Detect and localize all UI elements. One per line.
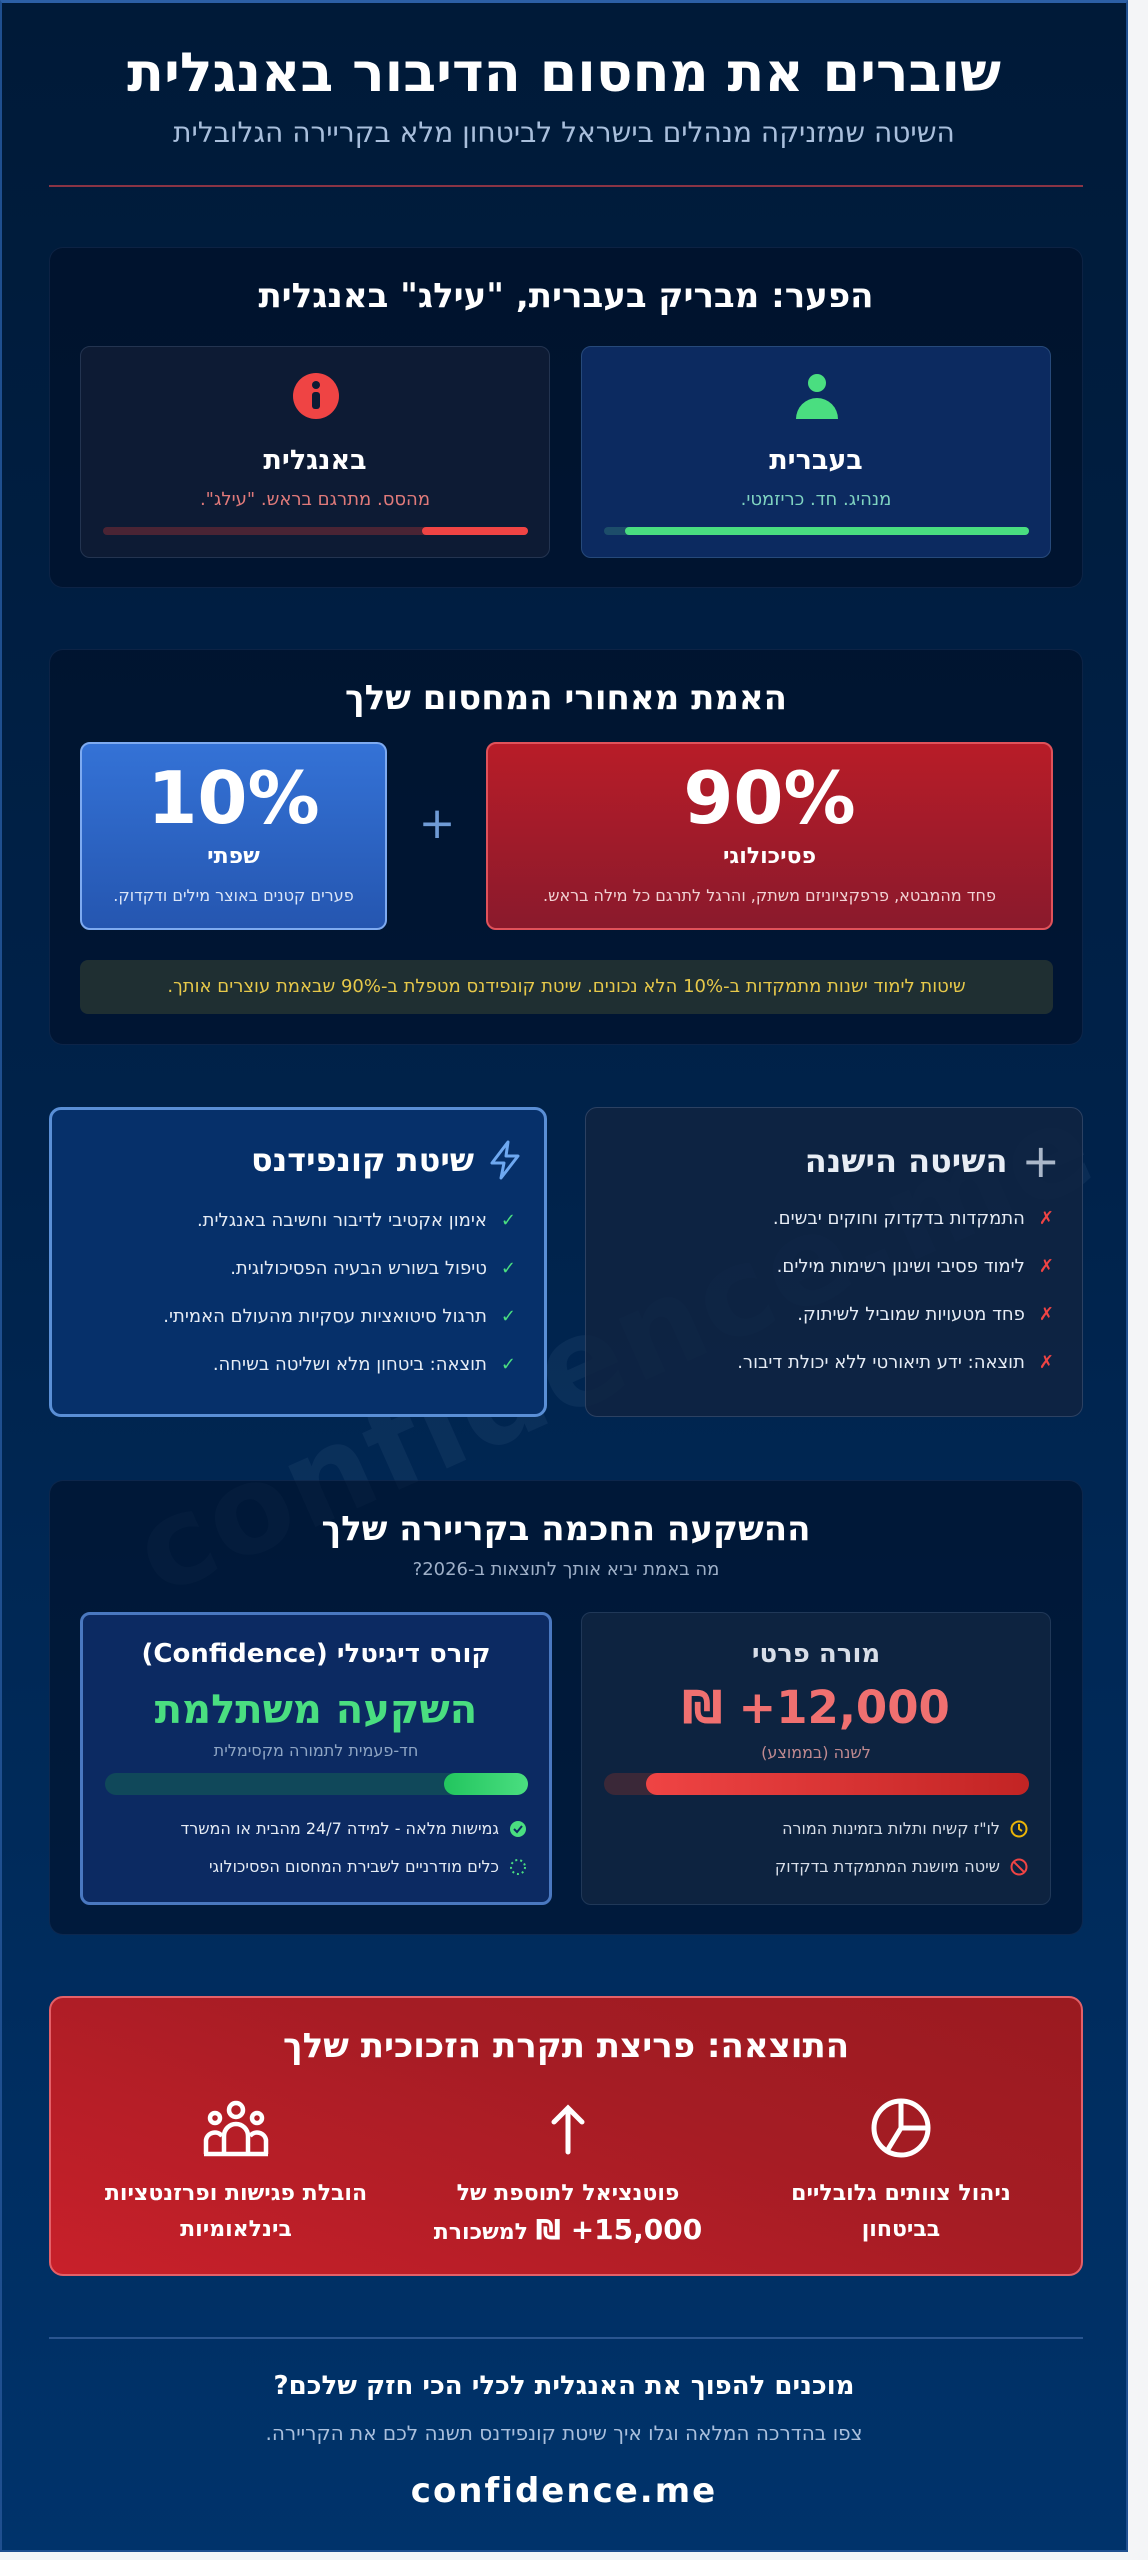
item: presentations: הובלת פגישות ופרזנטציות (105, 2181, 367, 2206)
box: 90%: 90% (683, 756, 856, 840)
footer text: צפו בהדרכה המלאה וגלו איך שיטת קונפידנס תשנה לכם את הקריירה. (266, 2421, 862, 2445)
item: salary: ₪ +15,000 למשכורת (434, 2213, 702, 2246)
label: בעברית (769, 445, 863, 476)
card: digital course: קורס דיגיטלי (Confidence) (141, 1639, 491, 1669)
item: presentations: בינלאומיות (180, 2217, 292, 2242)
item: global teams: בביטחון (862, 2217, 940, 2242)
list: ✗ (1039, 1208, 1054, 1229)
item: גמישות מלאה - למידה 24/7 מהבית או המשרד (180, 1819, 499, 1838)
box: 10%: שפתי (207, 844, 260, 869)
list: אימון אקטיבי לדיבור וחשיבה באנגלית. (197, 1210, 487, 1231)
box: 90%: פחד מהמבטא, פרפקציוניזם משתק, והרגל לתרגם כל מילה בראש. (543, 886, 996, 905)
box: 10% (80, 742, 387, 930)
panel: result (49, 1996, 1083, 2276)
card: private teacher: שיטה מיושנת המתמקדת בדקדוק (775, 1857, 1000, 1876)
label: השקעה משתלמת (155, 1687, 477, 1733)
footer question: מוכנים להפוך את האנגלית לכלי הכי חזק שלכם? (274, 2371, 854, 2401)
divider (49, 185, 1083, 187)
card: english (80, 346, 550, 558)
label: באנגלית (263, 445, 367, 476)
note bar (80, 960, 1053, 1014)
bar (604, 527, 1029, 535)
item: salary: פוטנציאל לתוספת של (457, 2181, 679, 2206)
panel: confidence method: ✓ (501, 1306, 516, 1327)
text: מהסס. מתרגם בראש. "עילג". (200, 489, 430, 510)
card: digital course: חד-פעמית לתמורה מקסימלית (214, 1741, 418, 1760)
panel: old method: ✗ (1039, 1352, 1054, 1373)
panel: confidence method: תרגול סיטואציות עסקיות מהעולם האמיתי. (163, 1306, 487, 1327)
card: digital course (80, 1612, 552, 1905)
panel: truth (49, 649, 1083, 1045)
panel: old method: ✗ (1039, 1304, 1054, 1325)
card: private teacher (581, 1612, 1051, 1905)
item: לו"ז קשיח ותלות בזמינות המורה (782, 1819, 1000, 1838)
bar (604, 1773, 1029, 1795)
panel: gap (49, 247, 1083, 588)
panel: old method: פחד מטעויות שמוביל לשיתוק. (797, 1304, 1025, 1325)
heading: ההשקעה החכמה בקריירה שלך (321, 1509, 811, 1549)
url: confidence.me (411, 2471, 717, 2511)
panel: old method (585, 1107, 1083, 1417)
panel: old method: ✗ (1039, 1256, 1054, 1277)
divider (49, 2337, 1083, 2339)
panel: confidence method: טיפול בשורש הבעיה הפסיכולוגית. (230, 1258, 487, 1279)
panel: old method: תוצאה: ידע תיאורטי ללא יכולת דיבור. (737, 1352, 1025, 1373)
heading (805, 1134, 1060, 1188)
subtitle: השיטה שמזניקה מנהלים בישראל לביטחון מלא בקריירה הגלובלית (173, 116, 955, 149)
box: 10%: פערים קטנים באוצר מילים ודקדוק. (113, 886, 354, 905)
panel: confidence method: ✓ (501, 1258, 516, 1279)
item: presentations (105, 2100, 367, 2242)
heading: שיטת קונפידנס (251, 1141, 474, 1179)
item: global teams: ניהול צוותים גלובליים (791, 2181, 1011, 2206)
icon: person (796, 374, 838, 419)
card: hebrew (581, 346, 1051, 558)
item: salary (434, 2104, 702, 2246)
panel: investment (49, 1480, 1083, 1935)
card: private teacher: לשנה (בממוצע) (761, 1743, 871, 1762)
box: 90% (486, 742, 1053, 930)
heading: האמת מאחורי המחסום שלך (345, 678, 787, 718)
bar (105, 1773, 528, 1795)
panel: confidence method: ✓ (501, 1354, 516, 1375)
text: מנהיג. חד. כריזמטי. (741, 489, 891, 510)
heading: + (1021, 1134, 1060, 1188)
panel: old method: לימוד פסיבי ושינון רשימות מילים. (777, 1256, 1025, 1277)
card: digital course: כלים מודרניים לשבירת המחסום הפסיכולוגי (209, 1857, 499, 1876)
list: התמקדות בדקדוק וחוקים יבשים. (773, 1208, 1025, 1229)
price: ₪ +12,000 (682, 1681, 950, 1734)
note bar: שיטות לימוד ישנות מתמקדות ב-10% הלא נכונים. שיטת קונפידנס מטפלת ב-90% שבאמת עוצרים אותך. (167, 976, 966, 997)
heading: gap: הפער: מבריק בעברית, "עילג" באנגלית (258, 276, 874, 316)
heading: השיטה הישנה (805, 1142, 1007, 1180)
item: global teams (791, 2098, 1011, 2242)
title: שוברים את מחסום הדיבור באנגלית (127, 41, 1001, 104)
bar (103, 527, 528, 535)
box: 10%: 10% (147, 756, 320, 840)
list: ✓ (501, 1210, 516, 1231)
box: 90%: פסיכולוגי (723, 844, 816, 869)
icon: info (293, 373, 339, 419)
subheading: מה באמת יביא אותך לתוצאות ב-2026? (413, 1559, 719, 1580)
watermark: confidence.me (114, 1073, 1114, 1623)
heading: התוצאה: פריצת תקרת הזכוכית שלך (283, 2026, 849, 2066)
panel: confidence method (49, 1107, 547, 1417)
plus: + (419, 798, 455, 849)
card: private teacher: מורה פרטי (752, 1639, 880, 1669)
panel: confidence method: תוצאה: ביטחון מלא ושליטה בשיחה. (213, 1354, 487, 1375)
